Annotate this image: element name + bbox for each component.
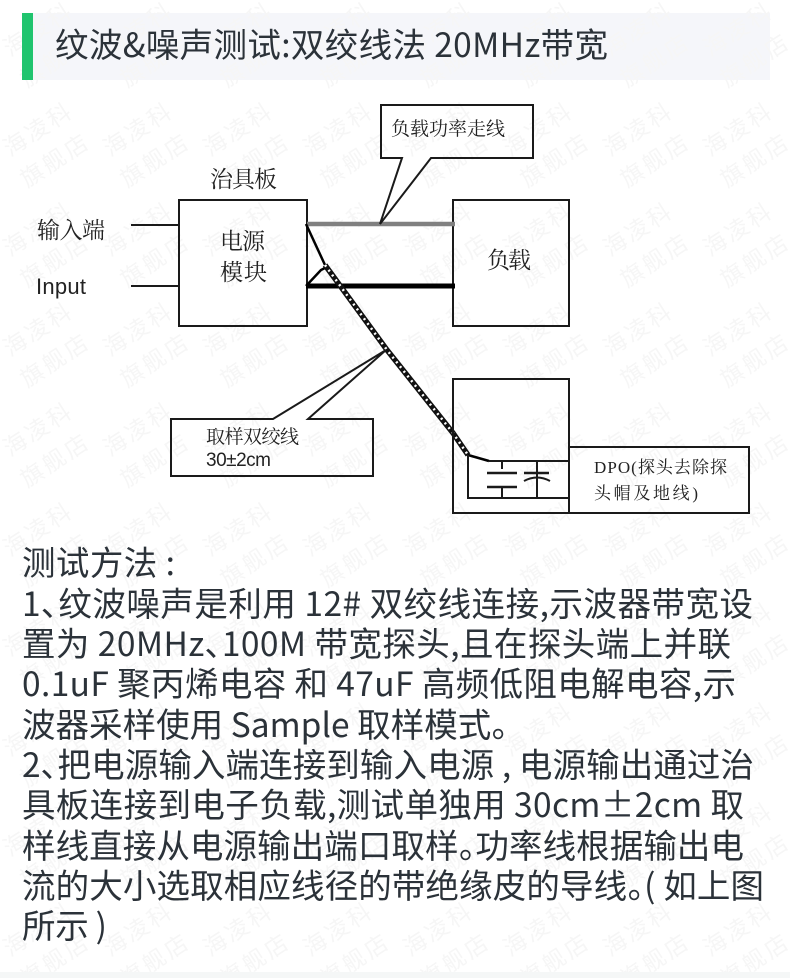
DPO label box (569, 447, 749, 513)
power module box (179, 200, 307, 326)
twisted pair sampling wire (306, 224, 468, 455)
step 1 (22, 577, 753, 747)
step 2 (22, 738, 764, 948)
DPO label box: 头帽及地线) (594, 484, 698, 503)
label: fixture board: 治具板 (210, 167, 277, 192)
step 2: 具板连接到电子负载,测试单独用 30cm±2cm 取 (22, 778, 744, 827)
step 2: 流的大小选取相应线径的带绝缘皮的导线。( 如上图 (22, 859, 764, 908)
step 2: 2、把电源输入端连接到输入电源 , 电源输出通过治 (22, 738, 754, 787)
title bar: 纹波&噪声测试:双绞线法 20MHz带宽 (55, 18, 608, 67)
DPO label box: DPO(探头去除探 (594, 457, 727, 477)
step 2: 样线直接从电源输出端口取样。功率线根据输出电 (22, 819, 744, 868)
step 2: 所示 ) (22, 899, 107, 948)
callout: sampling twisted pair (171, 350, 386, 476)
step 1: 0.1uF 聚丙烯电容 和 47uF 高频低阻电解电容,示 (22, 657, 736, 706)
callout: load power trace (380, 105, 533, 224)
circuit diagram (36, 105, 749, 513)
test method text (22, 536, 764, 948)
load box: 负载 (487, 248, 531, 273)
callout: sampling twisted pair: 取样双绞线 (206, 426, 299, 448)
heading: test method: 测试方法 : (22, 536, 175, 585)
power module box: 电源 (220, 229, 266, 254)
callout: load power trace: 负载功率走线 (391, 118, 505, 140)
load box (453, 200, 569, 326)
label: input terminal: 输入端 (37, 218, 105, 243)
bottom strip (0, 972, 790, 978)
load power wire (307, 222, 455, 226)
power module box: 模块 (220, 260, 267, 285)
step 1: 1、纹波噪声是利用 12# 双绞线连接,示波器带宽设 (22, 577, 753, 626)
input wires (131, 225, 179, 286)
probe capacitor circuit (468, 455, 569, 498)
callout: sampling twisted pair: 30±2cm (206, 450, 271, 471)
step 1: 波器采样使用 Sample 取样模式。 (22, 698, 508, 747)
oscilloscope probe box (453, 379, 569, 513)
title background (33, 13, 770, 80)
title bar (22, 13, 608, 80)
black power wire (306, 284, 455, 288)
step 1: 置为 20MHz、100M 带宽探头,且在探头端上并联 (22, 617, 731, 666)
label: Input: Input (36, 274, 86, 299)
